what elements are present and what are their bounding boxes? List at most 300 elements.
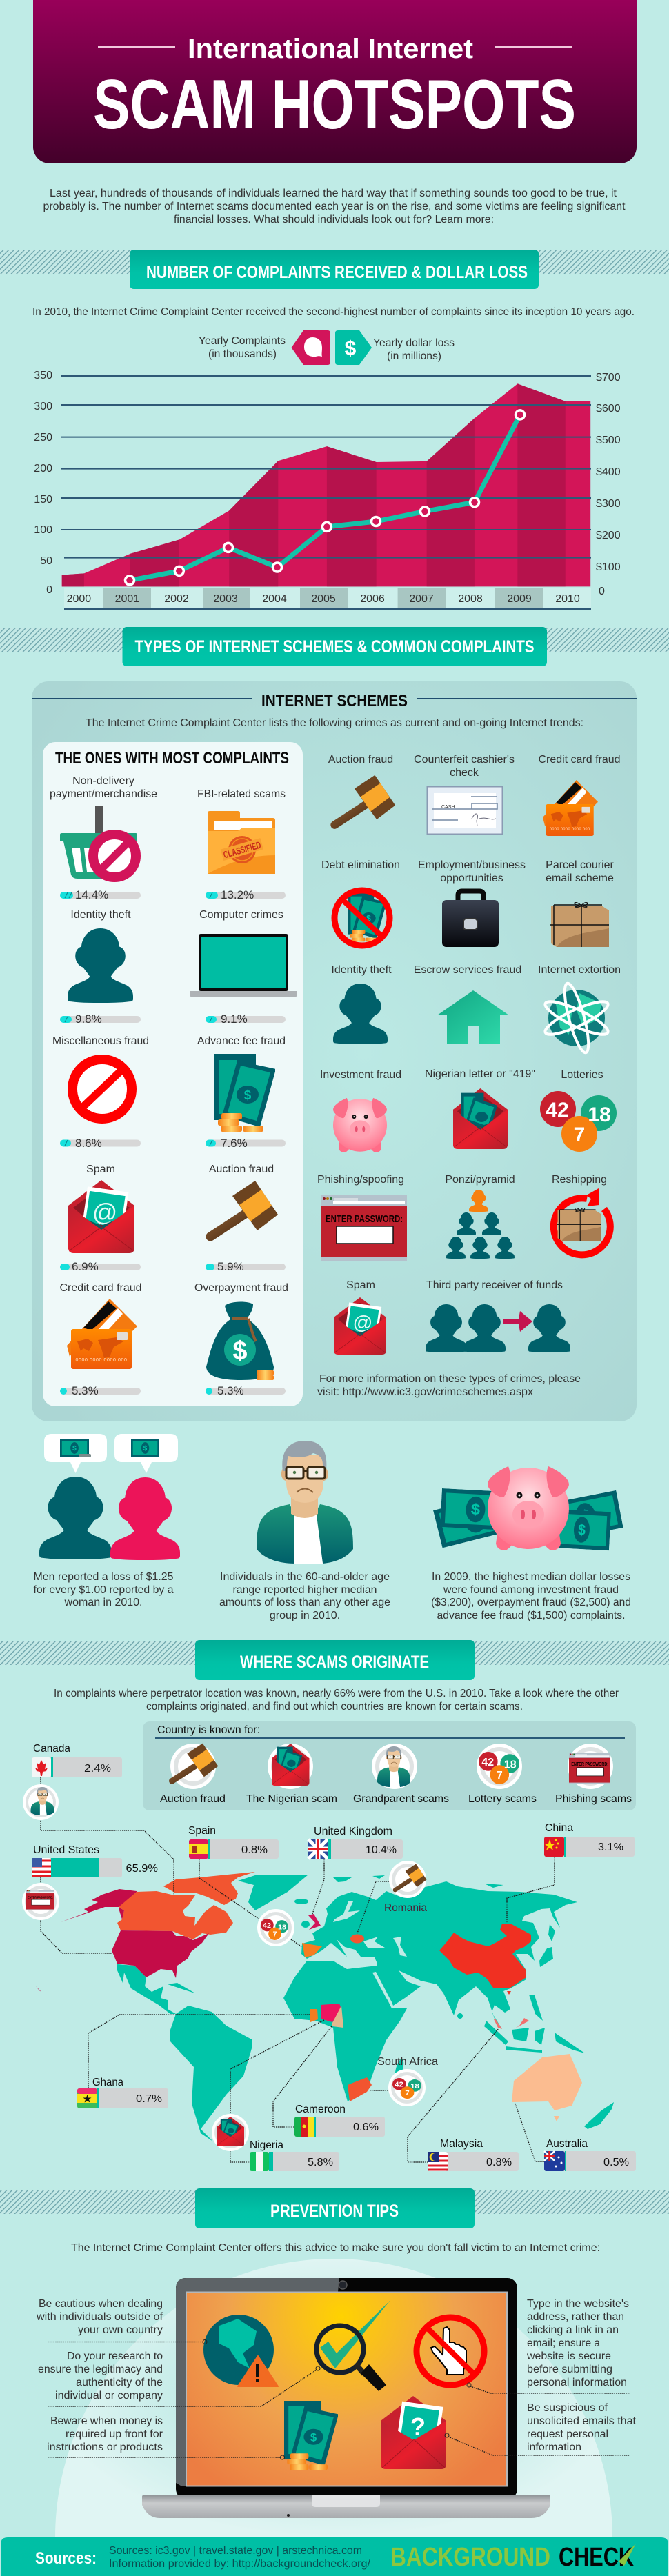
country: Ghana: 0.7% bbox=[136, 2093, 162, 2105]
flag: Cameroon bbox=[294, 2117, 314, 2137]
legend: country is known for: Country is known for: bbox=[157, 1724, 260, 1736]
map: water cut-outs bbox=[174, 1901, 412, 2008]
scheme: escrow services: Escrow services fraud bbox=[414, 964, 521, 976]
item: auction fraud: Auction fraud bbox=[209, 1164, 274, 1175]
icon: globe with warning bbox=[203, 2315, 278, 2386]
item: non-delivery: Non-delivery bbox=[72, 775, 134, 787]
tip: be cautious: Be cautious when dealing bbox=[39, 2298, 163, 2310]
scheme: investment fraud bbox=[320, 1069, 401, 1152]
legend item: lottery scams bbox=[468, 1744, 537, 1805]
icon: money bag bbox=[206, 1301, 274, 1380]
tip: type in the address: email; ensure a bbox=[527, 2337, 600, 2349]
bar: 9.8% bbox=[60, 1012, 141, 1026]
scheme: identity theft: Identity theft bbox=[331, 964, 392, 976]
scheme: employment bbox=[418, 859, 526, 947]
stat: men vs women bbox=[33, 1434, 180, 1608]
country: Australia: 0.5% bbox=[603, 2157, 629, 2168]
country: Ghana: Ghana bbox=[92, 2077, 123, 2088]
left axis labels: 250 bbox=[34, 432, 52, 443]
left axis labels: 150 bbox=[34, 494, 52, 506]
stat: highest median losses bbox=[431, 1466, 631, 1621]
map: South Africa bbox=[348, 2077, 372, 2101]
scheme: phishing bbox=[317, 1174, 407, 1261]
laptop illustration bbox=[142, 2278, 550, 2518]
bar: 9.8%: 9.8% bbox=[75, 1012, 102, 1026]
icons: man and woman silhouettes bbox=[39, 1477, 180, 1560]
scheme: lotteries bbox=[540, 1069, 617, 1152]
marker: Spain lottery scams bbox=[257, 1909, 294, 1946]
left axis labels: 200 bbox=[34, 463, 52, 475]
scheme: nigerian letter bbox=[425, 1068, 535, 1149]
scheme: internet extortion bbox=[538, 964, 621, 1055]
left axis labels bbox=[34, 370, 52, 596]
item: overpayment fraud bbox=[194, 1282, 288, 1397]
decorative title rules bbox=[98, 46, 572, 48]
section heading: complaints: NUMBER OF COMPLAINTS RECEIVED & DOLLAR LOSS bbox=[146, 263, 528, 282]
icon: money and coins bbox=[284, 2401, 339, 2470]
scheme: debt elimination bbox=[321, 859, 400, 946]
scheme: internet extortion: Internet extortion bbox=[538, 964, 621, 976]
right axis labels: 0 bbox=[599, 586, 605, 597]
scheme: ponzi pyramid: Ponzi/pyramid bbox=[445, 1174, 515, 1186]
flag: China bbox=[544, 1837, 564, 1857]
left axis labels: 100 bbox=[34, 524, 52, 536]
scheme: credit card fraud bbox=[538, 754, 621, 836]
caption bbox=[219, 1571, 390, 1621]
right axis labels: $100 bbox=[596, 561, 621, 573]
year axis: 2004 bbox=[262, 593, 287, 605]
scheme: debt elimination: Debt elimination bbox=[321, 859, 400, 871]
icon: envelope with question mark: ? bbox=[410, 2413, 426, 2441]
icon: pig with money bbox=[433, 1466, 623, 1550]
country: Canada bbox=[32, 1743, 122, 1777]
caption bbox=[431, 1571, 631, 1621]
header banner bbox=[33, 0, 637, 163]
flag: Australia bbox=[544, 2151, 565, 2171]
caption: range reported higher median bbox=[233, 1584, 377, 1596]
item: overpayment fraud: Overpayment fraud bbox=[194, 1282, 288, 1294]
sub-panel: most complaints bbox=[43, 742, 303, 1406]
tip: type in the address: before submitting bbox=[527, 2364, 612, 2375]
country: United Kingdom bbox=[308, 1826, 403, 1859]
chart legend: (in thousands) bbox=[208, 348, 277, 360]
right axis labels: $300 bbox=[596, 498, 621, 510]
item: advance fee fraud bbox=[197, 1035, 286, 1150]
bar: 7.6%: 7.6% bbox=[221, 1137, 248, 1150]
tip: be suspicious: information bbox=[527, 2442, 581, 2453]
sources text bbox=[109, 2545, 371, 2570]
tip: type in the address bbox=[526, 2298, 629, 2388]
icon: money and coins bbox=[214, 1054, 276, 1132]
flag: USA bbox=[32, 1858, 51, 1877]
flag: Nigeria bbox=[250, 2152, 269, 2171]
icon: envelope with question mark bbox=[381, 2396, 446, 2469]
tip: type in the address: website is secure bbox=[526, 2350, 611, 2362]
country: Australia bbox=[544, 2138, 636, 2171]
legend item: auction fraud bbox=[160, 1744, 226, 1805]
scheme: credit card fraud: Credit card fraud bbox=[538, 754, 621, 766]
country: Canada: 2.4% bbox=[84, 1763, 111, 1775]
country: South Africa bbox=[377, 2056, 438, 2106]
icon: classified folder bbox=[208, 811, 275, 874]
tip: be suspicious: Be suspicious of bbox=[527, 2402, 608, 2414]
bar: 7.6% bbox=[206, 1137, 286, 1150]
map: United Kingdom bbox=[308, 1914, 321, 1930]
icon: laptop bbox=[190, 934, 297, 997]
scheme: counterfeit check: CASH bbox=[441, 805, 455, 810]
section heading: complaints bbox=[0, 250, 669, 289]
scheme: counterfeit check: Counterfeit cashier's bbox=[414, 754, 515, 766]
tip: do your research: ensure the legitimacy and bbox=[38, 2364, 163, 2375]
origin intro text: In complaints where perpetrator location was known, nearly 66% were from the U.S. in 2010. Take a look where the other bbox=[54, 1688, 619, 1699]
year axis bbox=[64, 588, 591, 609]
bar: 8.6%: 8.6% bbox=[75, 1137, 102, 1150]
map: Romania bbox=[350, 1934, 364, 1944]
left axis labels: 0 bbox=[46, 584, 52, 596]
marker: Canada grandparent scams bbox=[23, 1784, 59, 1820]
item: spam: Spam bbox=[86, 1164, 115, 1175]
scheme: spam: Spam bbox=[346, 1279, 375, 1291]
icon: gavel bbox=[395, 1864, 427, 1890]
intro text: financial losses. What should individuals look out for? Learn more: bbox=[174, 214, 494, 226]
year axis: 2007 bbox=[409, 593, 434, 605]
map: Spain bbox=[302, 1943, 322, 1957]
country: Romania: Romania bbox=[384, 1902, 427, 1914]
scheme: escrow services bbox=[414, 964, 521, 1044]
item: FBI-related scams: FBI-related scams bbox=[197, 788, 286, 800]
map: China bbox=[439, 1924, 531, 1995]
laptop screen bbox=[186, 2293, 507, 2486]
icon: lottery balls bbox=[392, 2078, 421, 2099]
item: miscellaneous fraud: Miscellaneous fraud bbox=[52, 1035, 149, 1047]
panel: internet schemes bbox=[32, 681, 637, 1421]
title line 1: International Internet bbox=[188, 34, 473, 64]
map: Ghana bbox=[310, 2009, 318, 2022]
country: United States: 65.9% bbox=[126, 1863, 158, 1875]
map: United States bbox=[112, 1930, 209, 1978]
icon: money bag: $ bbox=[232, 1337, 248, 1366]
scheme: parcel courier: Parcel courier bbox=[546, 859, 615, 871]
tip: beware bbox=[47, 2415, 163, 2453]
bar: 5.3%: 5.3% bbox=[72, 1384, 99, 1397]
item: advance fee fraud: Advance fee fraud bbox=[197, 1035, 286, 1047]
caption: Men reported a loss of $1.25 bbox=[33, 1571, 174, 1583]
chart legend: (in millions) bbox=[387, 350, 441, 362]
chart legend: Yearly dollar loss bbox=[373, 337, 455, 349]
flag: Canada bbox=[32, 1757, 51, 1777]
bar: 9.1% bbox=[206, 1012, 286, 1026]
logo: CHECK bbox=[559, 2543, 634, 2572]
scheme: lotteries: Lotteries bbox=[561, 1069, 603, 1081]
country: Malaysia bbox=[428, 2138, 519, 2171]
tip: do your research: Do your research to bbox=[67, 2350, 163, 2362]
map: Alaska and Hawaii bbox=[36, 1889, 137, 1992]
country: Australia: Australia bbox=[546, 2138, 588, 2150]
year axis: 2000 bbox=[67, 593, 91, 605]
legend item: auction fraud: Auction fraud bbox=[160, 1793, 226, 1805]
tip: be cautious: your own country bbox=[78, 2324, 163, 2336]
caption: advance fee fraud ($1,500) complaints. bbox=[437, 1610, 625, 1621]
section heading: prevention tips bbox=[0, 2188, 669, 2228]
scheme: employment: Employment/business bbox=[418, 859, 526, 871]
country: Cameroon: 0.6% bbox=[353, 2121, 379, 2133]
laptop camera bbox=[339, 2281, 347, 2289]
logo: BACKGROUND bbox=[390, 2543, 550, 2572]
icon: dollar tag bbox=[335, 330, 372, 365]
caption: group in 2010. bbox=[270, 1610, 340, 1621]
country: China: China bbox=[545, 1822, 573, 1834]
year axis: 2001 bbox=[115, 593, 139, 605]
icon: dollar tag: $ bbox=[345, 337, 357, 360]
tip: be cautious bbox=[36, 2298, 163, 2336]
sources text: Information provided by: http://backgroundcheck.org/ bbox=[109, 2558, 371, 2570]
caption: In 2009, the highest median dollar losses bbox=[432, 1571, 630, 1583]
year axis: 2009 bbox=[507, 593, 532, 605]
legend item: lottery scams: Lottery scams bbox=[468, 1793, 537, 1805]
item: computer crimes: Computer crimes bbox=[199, 909, 283, 921]
icon: no clicking hand bbox=[417, 2317, 484, 2385]
year axis: 2006 bbox=[360, 593, 385, 605]
icon: grandparent bbox=[257, 1441, 353, 1564]
scheme: parcel courier bbox=[546, 859, 615, 947]
stat: older age range bbox=[219, 1441, 390, 1621]
tip: be suspicious bbox=[527, 2402, 637, 2453]
year axis: 2010 bbox=[555, 593, 580, 605]
tip: type in the address: address, rather than bbox=[527, 2311, 624, 2323]
scheme: auction fraud bbox=[328, 754, 395, 825]
flag: Ghana bbox=[77, 2088, 97, 2108]
prevention intro text: The Internet Crime Complaint Center offers this advice to make sure you don't fall victim to an Internet crime: bbox=[71, 2242, 600, 2254]
scheme: third party bbox=[426, 1279, 570, 1352]
scheme: ponzi pyramid bbox=[445, 1174, 515, 1259]
right axis labels: $500 bbox=[596, 435, 621, 446]
tip: type in the address: Type in the website's bbox=[527, 2298, 629, 2310]
country: Romania bbox=[384, 1861, 427, 1914]
country: Spain: 0.8% bbox=[241, 1844, 268, 1856]
intro text: Last year, hundreds of thousands of individuals learned the hard way that if something sounds too good to be true, it bbox=[50, 188, 617, 199]
bar: 6.9% bbox=[60, 1260, 141, 1273]
more information text bbox=[317, 1373, 581, 1398]
bar: 5.9% bbox=[206, 1260, 286, 1273]
item: credit card fraud bbox=[59, 1282, 142, 1397]
marker: US phishing scams bbox=[22, 1883, 59, 1920]
scheme: reshipping bbox=[552, 1174, 610, 1255]
sources text: Sources: ic3.gov | travel.state.gov | arstechnica.com bbox=[109, 2545, 362, 2557]
right axis labels bbox=[596, 372, 621, 597]
bar: 5.9%: 5.9% bbox=[217, 1260, 244, 1273]
year axis: 2008 bbox=[458, 593, 483, 605]
item: non-delivery: payment/merchandise bbox=[50, 788, 157, 800]
bar: 9.1%: 9.1% bbox=[221, 1012, 248, 1026]
caption: for every $1.00 reported by a bbox=[33, 1584, 174, 1596]
item: computer crimes bbox=[190, 909, 297, 1026]
country: Spain bbox=[188, 1825, 279, 1859]
item: credit card fraud: Credit card fraud bbox=[59, 1282, 142, 1294]
right axis labels: $600 bbox=[596, 403, 621, 415]
flag: Spain bbox=[189, 1839, 208, 1859]
caption: Individuals in the 60-and-older age bbox=[220, 1571, 390, 1583]
tip: be cautious: with individuals outside of bbox=[36, 2311, 163, 2323]
scheme: auction fraud: Auction fraud bbox=[328, 754, 393, 766]
country: Canada: Canada bbox=[33, 1743, 70, 1755]
bar: 14.4% bbox=[60, 888, 141, 901]
item: non-delivery bbox=[50, 775, 157, 901]
bar: 14.4%: 14.4% bbox=[75, 888, 108, 901]
sub-panel heading: THE ONES WITH MOST COMPLAINTS bbox=[55, 749, 289, 768]
map: Nigeria bbox=[321, 2004, 341, 2022]
scheme: phishing: Phishing/spoofing bbox=[317, 1174, 404, 1186]
tip: beware: required up front for bbox=[66, 2428, 163, 2440]
country: United Kingdom: 10.4% bbox=[366, 1844, 397, 1856]
bar: 5.3% bbox=[206, 1384, 286, 1397]
country: Spain: Spain bbox=[188, 1825, 216, 1837]
right axis labels: $200 bbox=[596, 530, 621, 541]
legend item: grandparent scams: Grandparent scams bbox=[353, 1793, 449, 1805]
legend item: phishing scams bbox=[555, 1744, 632, 1805]
item: miscellaneous fraud bbox=[52, 1035, 149, 1150]
complaints area bbox=[62, 372, 590, 587]
flag: Malaysia bbox=[428, 2152, 448, 2171]
sources heading: Sources: bbox=[35, 2549, 97, 2568]
scheme: reshipping: Reshipping bbox=[552, 1174, 607, 1186]
section heading: types of schemes bbox=[0, 627, 669, 666]
origin intro text bbox=[54, 1688, 619, 1713]
country: Nigeria bbox=[250, 2139, 339, 2171]
year axis: 2005 bbox=[311, 593, 336, 605]
icon: basket with prohibition sign bbox=[60, 806, 137, 879]
legend item: grandparent scams bbox=[353, 1744, 449, 1805]
caption: were found among investment fraud bbox=[443, 1584, 619, 1596]
scheme: nigerian letter: Nigerian letter or "419" bbox=[425, 1068, 535, 1080]
year axis: 2002 bbox=[164, 593, 189, 605]
icon: complaints tag bbox=[291, 330, 330, 365]
icon: credit cards bbox=[67, 1299, 137, 1369]
tip lines bbox=[48, 2339, 630, 2459]
laptop base bbox=[142, 2495, 550, 2518]
left axis labels: 50 bbox=[40, 555, 52, 567]
section heading: where scams originate: WHERE SCAMS ORIGINATE bbox=[240, 1653, 429, 1672]
panel intro: The Internet Crime Complaint Center lists the following crimes as current and on-going Internet trends: bbox=[86, 717, 583, 729]
country: Nigeria: 5.8% bbox=[308, 2157, 333, 2168]
caption: amounts of loss than any other age bbox=[219, 1597, 390, 1608]
footer bbox=[1, 2537, 668, 2576]
scheme: investment fraud: Investment fraud bbox=[320, 1069, 401, 1081]
country: China bbox=[544, 1822, 635, 1857]
chart intro text: In 2010, the Internet Crime Complaint Center received the second-highest number of complaints since its inception 10 years ago. bbox=[32, 306, 635, 318]
section heading: where scams originate bbox=[0, 1640, 669, 1680]
country: South Africa: South Africa bbox=[377, 2056, 438, 2068]
dotted leader lines bbox=[41, 1777, 555, 2162]
flag: UK bbox=[308, 1839, 328, 1859]
tip: beware: instructions or products bbox=[47, 2442, 163, 2453]
scheme: third party: Third party receiver of funds bbox=[426, 1279, 563, 1291]
country: Ghana bbox=[77, 2077, 168, 2108]
year axis: 2003 bbox=[213, 593, 238, 605]
item: FBI-related scams bbox=[197, 788, 286, 901]
world map bbox=[36, 1872, 614, 2141]
scheme: spam bbox=[334, 1279, 386, 1355]
legend item: nigerian scam bbox=[246, 1744, 337, 1805]
country: United States bbox=[32, 1844, 158, 1877]
scheme: counterfeit check: check bbox=[450, 767, 479, 779]
scheme: parcel courier: email scheme bbox=[546, 872, 614, 884]
background arch bbox=[55, 2259, 612, 2537]
bar: 6.9%: 6.9% bbox=[72, 1260, 99, 1273]
tip: type in the address: personal information bbox=[527, 2377, 627, 2388]
intro text: probably is. The number of Internet scams documented each year is on the rise, and some victims are feeling significant bbox=[43, 201, 626, 212]
right axis labels: $400 bbox=[596, 466, 621, 478]
country: China: 3.1% bbox=[598, 1841, 623, 1853]
tip: be suspicious: unsolicited emails that bbox=[527, 2415, 637, 2427]
map: Canada bbox=[117, 1872, 255, 1939]
caption: woman in 2010. bbox=[64, 1597, 142, 1608]
map: Australia bbox=[512, 2054, 582, 2121]
item: identity theft bbox=[60, 909, 141, 1026]
country: Malaysia: 0.8% bbox=[486, 2157, 512, 2168]
tip: do your research: authenticity of the bbox=[76, 2377, 163, 2388]
map: Cameroon bbox=[332, 2006, 343, 2028]
section heading: prevention tips: PREVENTION TIPS bbox=[270, 2201, 399, 2221]
scheme: counterfeit check bbox=[414, 754, 515, 835]
legend item: nigerian scam: The Nigerian scam bbox=[246, 1793, 337, 1805]
country: Nigeria: Nigeria bbox=[250, 2139, 283, 2151]
icon: gavel bbox=[210, 1181, 278, 1237]
marker: Nigerian scam bbox=[212, 2114, 249, 2151]
chart: complaints and dollar loss bbox=[34, 370, 621, 609]
caption bbox=[33, 1571, 174, 1608]
icon: envelope with at sign bbox=[68, 1180, 134, 1253]
item: auction fraud bbox=[206, 1164, 286, 1273]
legend: country is known for bbox=[143, 1721, 636, 1810]
bar: 13.2% bbox=[206, 888, 286, 901]
chart legend: Yearly Complaints bbox=[199, 335, 286, 347]
country: United States: United States bbox=[33, 1844, 99, 1856]
icon: magnifier with check bbox=[317, 2300, 390, 2391]
arrow bbox=[503, 1311, 532, 1332]
panel heading: INTERNET SCHEMES bbox=[261, 692, 408, 710]
country: Cameroon bbox=[294, 2104, 385, 2137]
tip: do your research bbox=[38, 2350, 163, 2402]
bar: 5.3% bbox=[60, 1384, 141, 1397]
left axis labels: 350 bbox=[34, 370, 52, 381]
legend item: phishing scams: Phishing scams bbox=[555, 1793, 632, 1805]
laptop bezel bbox=[176, 2278, 517, 2499]
scheme: identity theft bbox=[331, 964, 392, 1044]
icon: person silhouette bbox=[68, 928, 133, 1003]
country: Cameroon: Cameroon bbox=[295, 2104, 346, 2115]
item: identity theft: Identity theft bbox=[70, 909, 131, 921]
bar: 8.6% bbox=[60, 1137, 141, 1150]
grid: all internet schemes bbox=[317, 754, 621, 1398]
tip: type in the address: clicking a link in an bbox=[527, 2324, 619, 2336]
chart legend bbox=[199, 330, 455, 365]
country: Malaysia: Malaysia bbox=[440, 2138, 483, 2150]
icon: classified folder: CLASSIFIED bbox=[222, 839, 262, 860]
scheme: employment: opportunities bbox=[440, 872, 503, 884]
speech bubbles bbox=[44, 1434, 178, 1473]
right axis labels: $700 bbox=[596, 372, 621, 383]
bar: 5.3%: 5.3% bbox=[217, 1384, 244, 1397]
bar: 13.2%: 13.2% bbox=[221, 888, 254, 901]
tip: do your research: individual or company bbox=[55, 2390, 163, 2402]
item: spam bbox=[60, 1164, 141, 1273]
map: Malaysia bbox=[494, 2018, 529, 2029]
section heading: types of schemes: TYPES OF INTERNET SCHEMES & COMMON COMPLAINTS bbox=[135, 637, 534, 657]
origin intro text: complaints originated, and find out which countries are known for certain scams. bbox=[146, 1701, 523, 1713]
caption: ($3,200), overpayment fraud ($2,500) and bbox=[431, 1597, 631, 1608]
more information text: visit: http://www.ic3.gov/crimeschemes.aspx bbox=[317, 1386, 533, 1398]
icon: red prohibition sign bbox=[72, 1059, 132, 1119]
